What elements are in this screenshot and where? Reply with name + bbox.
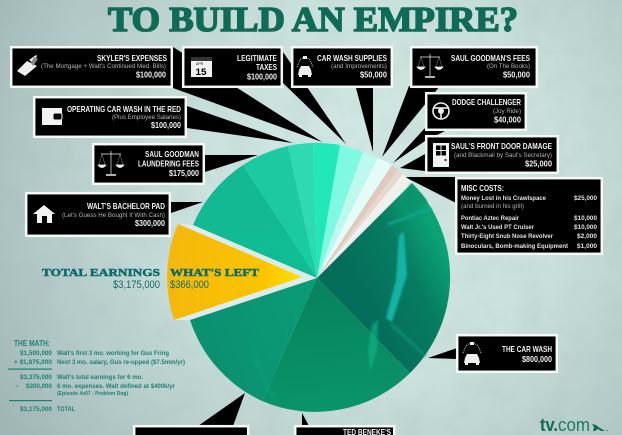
callout: misc costs: Binoculars, Bomb-making Equipment	[461, 243, 569, 250]
the math: $3,375,000	[20, 374, 52, 381]
slice: front door damage	[317, 170, 403, 278]
callout: the car wash: THE CAR WASH	[502, 344, 552, 354]
callout: misc costs: $1,000	[577, 243, 597, 250]
callout: saul goodman's fees: $50,000	[503, 70, 530, 80]
callout: saul goodman laundering fees: $175,000	[169, 168, 199, 178]
callout: saul goodman laundering fees: SAUL GOODMAN	[145, 149, 199, 159]
callout: saul's front door damage: $25,000	[525, 158, 552, 168]
callout: misc costs: $25,000	[574, 195, 597, 202]
the math: THE MATH:	[14, 339, 50, 348]
callout: misc costs: MISC COSTS:	[461, 183, 504, 193]
slice: what's left (yellow)	[167, 224, 302, 320]
callout: car wash supplies: (and Improvements)	[331, 64, 387, 70]
callout: skyler's expenses: (The Mortgage + Walt's Continued Med. Bills)	[41, 64, 166, 70]
callout: walt's bachelor pad: WALT'S BACHELOR PAD	[87, 201, 165, 211]
callout: misc costs: $10,000	[574, 215, 597, 222]
callout: the car wash	[457, 335, 557, 372]
callout: misc costs: (and burned in his grill)	[461, 204, 524, 210]
callout: misc costs: $10,000	[574, 224, 597, 231]
slice: skyler's expenses	[313, 143, 340, 278]
callout: misc costs: $2,000	[577, 233, 597, 240]
icon: animal	[592, 424, 605, 431]
the math: 6 mo. expenses. Walt defined at $400k/yr	[57, 383, 175, 390]
logo: tv.com	[540, 415, 608, 435]
slice: the car wash	[317, 183, 450, 373]
icon: door	[433, 143, 449, 167]
callout: saul's front door damage	[426, 136, 558, 173]
callout: legitimate taxes: LEGITIMATE	[237, 53, 277, 63]
total earnings	[42, 267, 160, 291]
slice: dodge challenger	[317, 165, 398, 278]
icon: calendar	[191, 57, 212, 78]
callout: operating car wash in the red: (Plus Employee Salaries)	[112, 115, 181, 121]
icon: steering wheel	[433, 103, 449, 119]
slice: operating car wash	[288, 143, 317, 278]
callout: bottom left box	[134, 426, 248, 435]
slice: lower right	[262, 278, 410, 412]
the math	[8, 339, 185, 413]
callout: misc costs: Thirty-Eight Snub Nose Revolver	[461, 233, 553, 240]
callout: dodge challenger: DODGE CHALLENGER	[452, 97, 521, 107]
callout: misc costs	[456, 178, 602, 254]
callout: the car wash: $800,000	[522, 354, 552, 364]
slice: lower left	[190, 278, 317, 401]
the math: Next 3 mo. salary, Gus re-upped ($7.5mm/yr)	[57, 359, 185, 366]
callout: dodge challenger	[426, 93, 526, 130]
callout: walt's bachelor pad	[26, 193, 170, 236]
callout: dodge challenger: (Joy Ride)	[493, 109, 521, 115]
callout: misc costs: Money Lost in his Crawlspace	[461, 195, 546, 202]
pie chart	[174, 143, 450, 412]
the math: Walt's total earnings for 6 mo.	[57, 374, 143, 381]
callout: walt's bachelor pad: (Let's Guess He Bought It With Cash)	[62, 213, 165, 219]
icon: car wash	[297, 56, 313, 77]
callout: operating car wash in the red: OPERATING CAR WASH IN THE RED	[67, 104, 181, 114]
the math: $200,000	[26, 383, 52, 390]
callout: car wash supplies: CAR WASH SUPPLIES	[317, 53, 387, 63]
icon: car wash	[463, 342, 481, 365]
icon: calendar: APR	[196, 62, 204, 66]
total earnings: $3,175,000	[113, 279, 160, 291]
logo: tv.com: com	[558, 415, 590, 435]
icon: calendar: 15	[196, 67, 207, 78]
callout: saul's front door damage: SAUL'S FRONT DOOR DAMAGE	[451, 141, 552, 151]
callout: skyler's expenses	[11, 47, 172, 87]
icon: money bag	[17, 55, 38, 76]
callout: saul goodman's fees: SAUL GOODMAN'S FEES	[451, 53, 530, 63]
icon: house	[33, 205, 55, 223]
callout: car wash supplies: $50,000	[360, 70, 387, 80]
photo overlay	[215, 183, 433, 402]
slice: saul goodman's fees	[317, 158, 392, 278]
callout: misc costs: Walt Jr.'s Used PT Cruiser	[461, 224, 534, 231]
what's left: WHAT'S LEFT	[170, 267, 260, 279]
slice: legitimate taxes	[317, 145, 363, 278]
callout: legitimate taxes: $100,000	[247, 72, 277, 82]
slice: walt's bachelor pad	[193, 165, 317, 278]
icon: wallet	[42, 108, 62, 125]
the math: $1,500,000	[20, 350, 52, 357]
callout: dodge challenger: $40,000	[494, 114, 521, 124]
callout: saul's front door damage: (and Blackmail by Saul's Secretary)	[454, 153, 552, 159]
callout rays	[171, 47, 457, 426]
callout: skyler's expenses: $100,000	[136, 70, 166, 80]
logo: tv.com: tv.	[540, 415, 558, 435]
callout: ted beneke's	[295, 426, 394, 435]
callout: saul goodman's fees: (On The Books)	[487, 64, 530, 70]
the math: (Episode 4x07 - Problem Dog)	[57, 391, 128, 397]
the math: Walt's first 3 mo. working for Gus Fring	[57, 350, 169, 357]
icon: scales	[417, 54, 443, 77]
callout: misc costs: Pontiac Aztec Repair	[461, 215, 519, 222]
callout: skyler's expenses: SKYLER'S EXPENSES	[97, 53, 167, 63]
gap behind yellow slice	[174, 224, 317, 320]
the math: + $1,875,000	[14, 359, 52, 366]
title: TO BUILD AN EMPIRE?	[108, 0, 518, 39]
slice: saul laundering fees	[243, 146, 317, 278]
the math: $3,175,000	[20, 406, 52, 413]
what's left	[170, 267, 260, 291]
callout: operating car wash in the red: $100,000	[151, 120, 181, 130]
the math: -	[16, 383, 18, 390]
slice: misc costs	[317, 174, 412, 278]
callout: car wash supplies	[292, 47, 392, 87]
callout: walt's bachelor pad: $300,000	[135, 218, 165, 228]
callout: legitimate taxes: TAXES	[256, 62, 277, 72]
total earnings: TOTAL EARNINGS	[42, 267, 160, 279]
callout: saul goodman laundering fees: LAUNDERING FEES	[138, 158, 199, 168]
icon: scales	[98, 151, 124, 175]
the math: TOTAL	[57, 406, 75, 413]
callout: saul goodman's fees	[411, 47, 537, 87]
what's left: $366,000	[170, 279, 209, 291]
callout: saul goodman laundering fees	[93, 144, 204, 184]
callout: operating car wash in the red	[34, 97, 186, 137]
slice: car wash supplies	[317, 152, 378, 278]
callout: legitimate taxes	[183, 47, 282, 87]
